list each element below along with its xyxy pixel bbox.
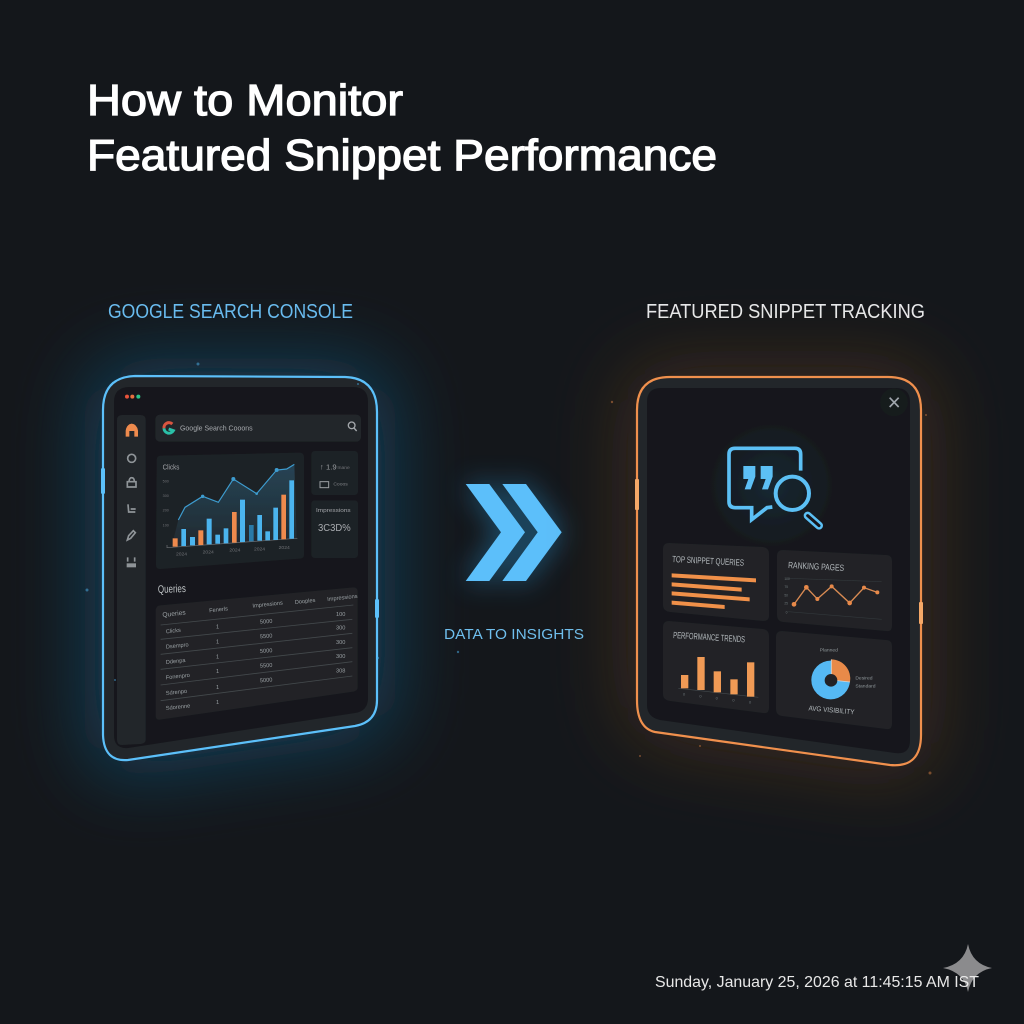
queries table: 1: [216, 669, 219, 675]
queries table: 300: [336, 654, 345, 660]
label: Google Search Console: GOOGLE SEARCH CONSOLE: [108, 301, 353, 323]
panel: Featured Snippet Tracking tablet: [620, 359, 939, 783]
queries table: 308: [336, 668, 345, 674]
icon: sparkle star: [943, 944, 992, 992]
panel: Google Search Console tablet: [85, 358, 395, 778]
donut chart: AVG VISIBILITY: [808, 705, 855, 716]
timestamp: Sunday, January 25, 2026 at 11:45:15 AM IST: [655, 974, 979, 991]
bar chart: 0: [732, 698, 735, 703]
chart panel: clicks: 200: [163, 509, 169, 513]
tablet side tabs: [101, 468, 379, 618]
icon: close: [880, 388, 908, 416]
chart panel: clicks: 100: [163, 524, 169, 528]
chart panel: clicks: 500: [163, 479, 169, 483]
bar chart: [678, 657, 758, 704]
line chart: 75: [784, 585, 788, 589]
chart panel: clicks: 2024: [254, 546, 265, 552]
icon: home: [126, 424, 138, 437]
glow particles: [86, 362, 932, 774]
chart panel: clicks: Clicks: [163, 463, 179, 472]
line chart: 100: [784, 577, 790, 581]
bar chart: 0: [749, 699, 752, 704]
queries table: Queries: [162, 610, 187, 619]
queries table: 300: [336, 640, 345, 646]
chart panel: clicks: 2024: [203, 550, 214, 556]
label: Featured Snippet Tracking: FEATURED SNIPPET TRACKING: [646, 301, 925, 323]
queries table: Dsempro: [166, 642, 189, 651]
queries table: 5500: [260, 663, 273, 670]
bar chart: 0: [699, 693, 702, 698]
trend line: [178, 464, 294, 520]
arrow: double chevron: [466, 484, 562, 581]
queries table: [156, 587, 358, 720]
card: ranking pages: [777, 550, 892, 631]
card: ranking pages: RANKING PAGES: [788, 560, 844, 573]
donut chart: Planned: [820, 648, 838, 654]
stat cards: ↑ 1.9: [320, 463, 337, 472]
search bar: [155, 415, 361, 442]
stat cards: Impressions: [316, 508, 351, 514]
line chart: 0: [786, 610, 788, 614]
queries table: 1: [216, 685, 219, 691]
queries table: Sdorenne: [166, 703, 191, 712]
stat cards: 3C3D%: [318, 523, 351, 534]
queries table: Dooples: [295, 598, 316, 606]
queries table: Impressions: [252, 600, 283, 610]
queries table: 5500: [260, 633, 273, 640]
search bar text: Google Search Cooons: [180, 424, 253, 433]
queries table: 1: [216, 639, 219, 645]
icon: Google G: [164, 423, 173, 433]
queries heading: Queries: [158, 583, 186, 596]
line chart: 25: [784, 602, 788, 606]
stat cards: Inane: [337, 465, 350, 471]
chart panel: clicks: 2024: [279, 545, 290, 551]
queries table: 1: [216, 700, 219, 706]
chart panel: clicks: 300: [163, 494, 169, 498]
queries table: 100: [336, 612, 345, 618]
icon: search: [348, 422, 357, 431]
queries table: 1: [216, 625, 219, 631]
queries table: Fonenpro: [166, 673, 190, 681]
title: [87, 76, 717, 180]
queries table: 5000: [260, 619, 273, 626]
card: avg visibility: [776, 631, 892, 729]
queries table: Ddenpa: [166, 658, 187, 666]
queries table: Fenerls: [209, 606, 228, 614]
chart panel: clicks: 2024: [229, 548, 241, 554]
sidebar: [117, 395, 146, 745]
bar chart: 0: [716, 696, 719, 701]
card: top snippet queries: [663, 543, 769, 621]
sidebar icons: [127, 454, 136, 567]
card: top snippet queries: TOP SNIPPET QUERIES: [672, 554, 744, 568]
queries table: Sdrenpo: [166, 689, 187, 697]
icon: quote bubble with magnifier: [702, 415, 842, 555]
label: Data to Insights: DATA TO INSIGHTS: [444, 626, 584, 643]
queries table: 300: [336, 626, 345, 632]
title: Featured Snippet Performance: [87, 131, 717, 180]
stat cards: [311, 451, 358, 558]
donut chart: Standard: [855, 683, 876, 689]
stat cards: Cooos: [333, 482, 348, 488]
line chart: 50: [784, 593, 788, 597]
queries table: Clicks: [166, 628, 181, 635]
queries table: 5000: [260, 677, 273, 684]
donut chart: [808, 648, 876, 716]
title: How to Monitor: [87, 76, 403, 125]
queries table: 5000: [260, 648, 273, 655]
tablet side tabs: [635, 479, 923, 624]
queries table: 1: [216, 654, 219, 660]
chart panel: clicks: 2024: [176, 552, 187, 558]
queries table: Impressions: [327, 594, 358, 603]
donut chart: Desired: [855, 675, 873, 681]
horizontal bars: [672, 573, 756, 609]
card: performance trends: [663, 621, 769, 713]
chart panel: clicks: 0: [166, 544, 168, 548]
card: performance trends: PERFORMANCE TRENDS: [673, 630, 745, 644]
icon: window controls: [125, 395, 140, 399]
bar chart: 0: [683, 692, 686, 697]
line chart: [784, 577, 882, 619]
chart panel: clicks: [156, 453, 304, 569]
bars: [173, 480, 294, 547]
